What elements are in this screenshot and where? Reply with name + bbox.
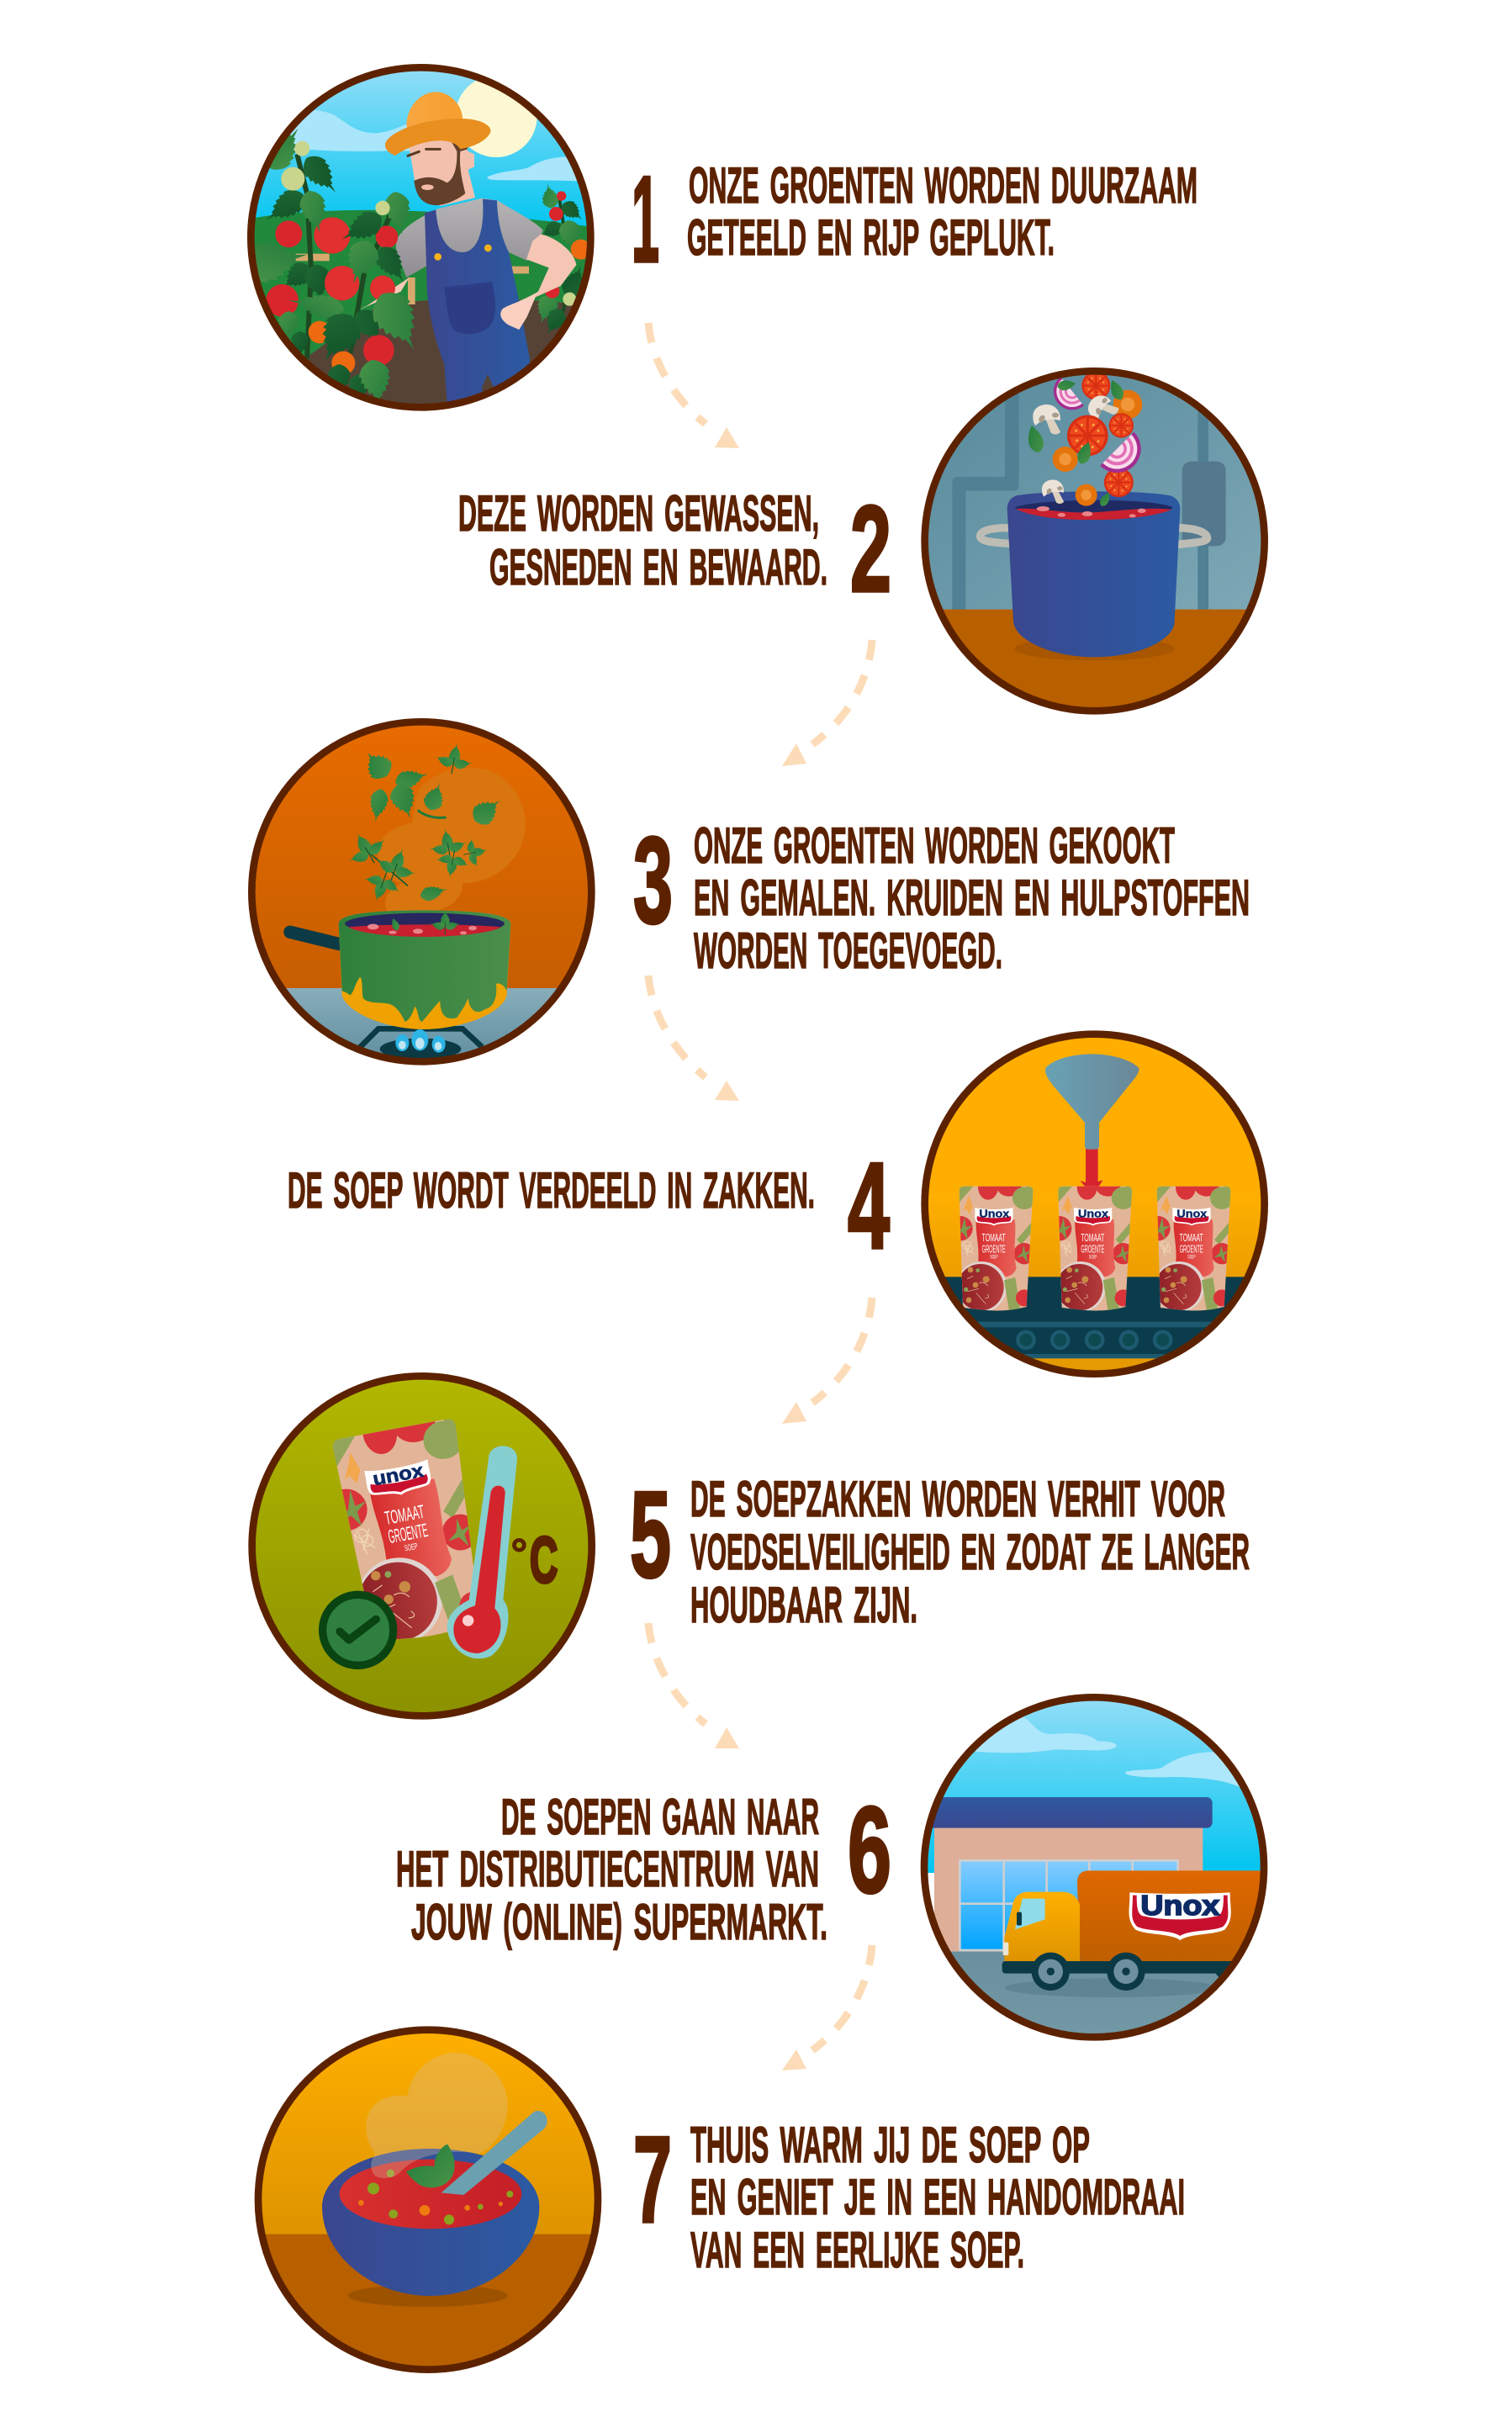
illustration: steaming bowl of soup xyxy=(251,2022,607,2380)
step 2 text: GESNEDEN EN BEWAARD. xyxy=(489,539,827,595)
logo: Unox xyxy=(1140,1891,1220,1922)
step 6 text xyxy=(396,1789,827,1950)
step 6 text: DE SOEPEN GAAN NAAR xyxy=(501,1789,819,1845)
step 2 number: 2 xyxy=(850,480,891,617)
steam xyxy=(366,2053,508,2178)
check badge xyxy=(323,1594,394,1665)
step 2 text: DEZE WORDEN GEWASSEN, xyxy=(458,485,819,542)
arrow: step 4 to 5 xyxy=(782,1298,872,1424)
pouch: GROENTE xyxy=(387,1520,430,1547)
illustration: heated pouch with thermometer xyxy=(244,1367,600,1724)
illustration: pan on gas with herbs xyxy=(244,715,600,1072)
pouch middle: GROENTE xyxy=(1081,1242,1104,1255)
pouch middle xyxy=(1058,1186,1132,1310)
arrow: step 1 to 2 xyxy=(648,323,739,448)
text: DE SOEP WORDT VERDEELD IN ZAKKEN. xyxy=(288,1162,815,1219)
truck xyxy=(1002,1870,1277,1991)
step 3 text xyxy=(694,817,1250,979)
step 7 text xyxy=(690,2117,1185,2278)
pouch middle: SOEP xyxy=(1089,1256,1097,1261)
burner xyxy=(360,1029,482,1060)
pouch left xyxy=(959,1186,1033,1310)
falling vegetables xyxy=(1028,375,1142,506)
degrees celsius: C xyxy=(530,1524,558,1596)
arrow: step 2 to 3 xyxy=(782,640,872,766)
pan xyxy=(339,910,510,1029)
text: 1 xyxy=(632,151,659,288)
pouch left: Unox xyxy=(979,1207,1010,1219)
arrow: step 3 to 4 xyxy=(648,976,739,1101)
herbs xyxy=(338,740,507,908)
thermometer xyxy=(447,1446,517,1658)
illustration: filling soup pouches on a conveyor xyxy=(921,1026,1277,1383)
left tomato plants xyxy=(241,120,431,409)
step 1 text xyxy=(687,157,1197,266)
bowl xyxy=(322,2149,539,2296)
step 1 text: GETEELD EN RIJP GEPLUKT. xyxy=(687,209,1055,266)
pouch right: TOMAAT xyxy=(1180,1231,1203,1244)
step 5 text xyxy=(690,1471,1250,1633)
step 7 text: VAN EEN EERLIJKE SOEP. xyxy=(690,2222,1024,2278)
pouch: TOMAAT xyxy=(383,1501,426,1529)
step 3 number: 3 xyxy=(633,812,673,949)
step 4 number: 4 xyxy=(848,1137,890,1274)
pouch xyxy=(333,1420,473,1640)
arrow: step 5 to 6 xyxy=(648,1623,739,1748)
illustration: delivery truck at distribution centre xyxy=(910,1688,1277,2047)
step 3 text: WORDEN TOEGEVOEGD. xyxy=(694,923,1002,979)
step 5 number: 5 xyxy=(630,1466,671,1603)
step 6 text: HET DISTRIBUTIECENTRUM VAN xyxy=(396,1841,819,1897)
funnel xyxy=(1045,1054,1139,1150)
pouch: SOEP xyxy=(404,1542,419,1553)
pouch left: SOEP xyxy=(990,1256,998,1261)
degrees celsius xyxy=(512,1536,558,1584)
conveyor rollers xyxy=(1018,1332,1171,1348)
pouch right: SOEP xyxy=(1187,1256,1196,1261)
pouch left: GROENTE xyxy=(982,1242,1006,1255)
step 2 text xyxy=(458,485,827,595)
step 6 text: JOUW (ONLINE) SUPERMARKT. xyxy=(411,1894,827,1950)
pouch right xyxy=(1157,1186,1231,1310)
pouch left: TOMAAT xyxy=(982,1231,1006,1244)
pouch middle: Unox xyxy=(1078,1207,1109,1219)
pouch: unox xyxy=(371,1460,426,1489)
pot handles xyxy=(981,528,1208,551)
logo xyxy=(1129,1891,1231,1940)
soup xyxy=(340,2160,521,2229)
illustration: farmer with tomato plants xyxy=(241,59,600,415)
pan handle xyxy=(290,932,340,944)
pouch right: Unox xyxy=(1176,1207,1208,1219)
farmer xyxy=(356,92,576,403)
pouch middle: TOMAAT xyxy=(1081,1231,1104,1244)
degrees celsius: ° xyxy=(510,1531,527,1578)
step 5 text: HOUDBAAR ZIJN. xyxy=(690,1577,917,1633)
step 7 number: 7 xyxy=(633,2111,672,2248)
step 7 text: THUIS WARM JIJ DE SOEP OP xyxy=(690,2117,1090,2173)
window xyxy=(959,1859,1179,1951)
pot xyxy=(1007,491,1180,657)
spoon xyxy=(441,2111,547,2195)
soup stream xyxy=(1080,1149,1103,1187)
right tomato plant xyxy=(537,183,587,334)
step 6 number: 6 xyxy=(848,1781,891,1918)
pouch right: GROENTE xyxy=(1180,1242,1203,1255)
basil leaf xyxy=(406,2144,455,2187)
arrow: step 6 to 7 xyxy=(782,1945,872,2070)
illustration: pot with falling vegetables xyxy=(921,363,1277,722)
